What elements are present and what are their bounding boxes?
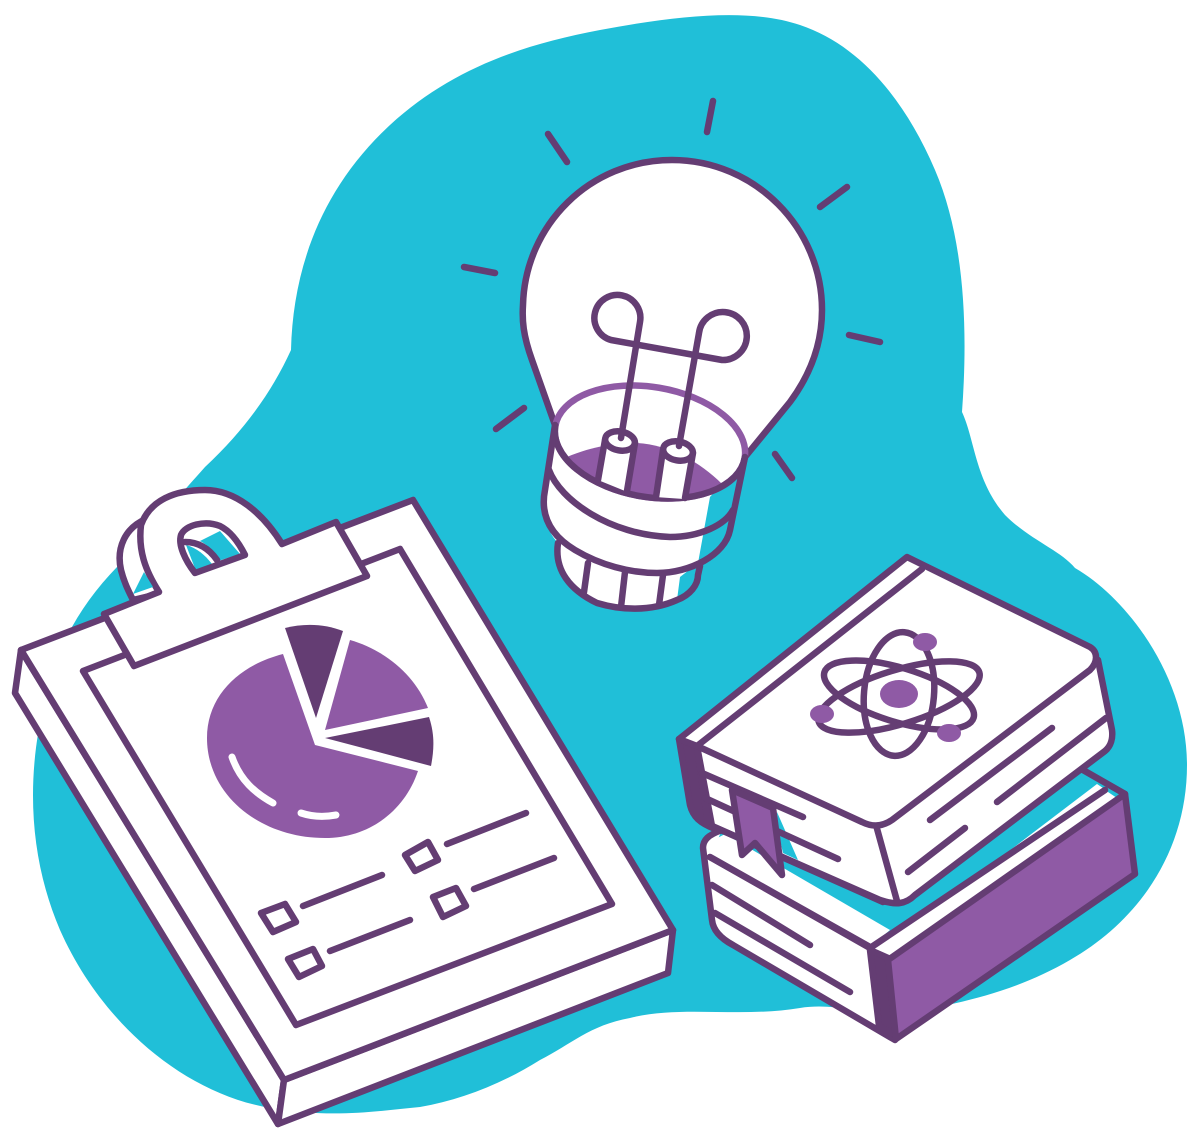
electron left bbox=[810, 705, 834, 723]
atom orbit one bbox=[817, 646, 981, 744]
page line 1 bbox=[702, 773, 803, 817]
paper sheet bbox=[83, 549, 612, 1025]
upper book pages bbox=[697, 660, 1112, 903]
cover inner line bbox=[697, 569, 922, 746]
right dark slice bbox=[325, 717, 433, 766]
upper book with atom bbox=[679, 557, 1112, 903]
legend line 1 bbox=[303, 875, 382, 906]
ray 7 bbox=[775, 454, 792, 478]
legend line 3 bbox=[330, 920, 410, 951]
clip hole inner arc bbox=[185, 542, 217, 560]
light rays bbox=[464, 101, 880, 478]
filament bbox=[594, 295, 747, 446]
light bulb bbox=[464, 101, 880, 609]
base band upper bbox=[549, 470, 733, 537]
clip hole outline bbox=[180, 523, 245, 573]
clip hole bbox=[180, 523, 245, 573]
lower book strip upper line bbox=[870, 790, 1105, 948]
clipboard bbox=[15, 490, 673, 1124]
right page line 1 bbox=[930, 728, 1052, 820]
atom nucleus bbox=[880, 680, 918, 708]
socket inner purple bbox=[568, 443, 721, 494]
lower book spine bbox=[870, 950, 897, 1036]
page line 3 bbox=[712, 826, 883, 902]
lower book page line 2 bbox=[712, 885, 810, 945]
teal seen through clip hole right bbox=[200, 531, 240, 561]
lower book page line top bbox=[710, 857, 870, 947]
thread line 1 bbox=[584, 563, 588, 592]
bookmark bbox=[732, 790, 782, 875]
socket lower rim bbox=[555, 426, 745, 499]
second pin edges bbox=[656, 450, 693, 498]
ray 6 bbox=[496, 408, 524, 429]
page fold edge bbox=[876, 825, 897, 901]
clipboard bottom edge bbox=[278, 930, 673, 1124]
pie highlight long bbox=[232, 757, 273, 803]
second contact pin bbox=[655, 439, 694, 499]
thread line 2 bbox=[621, 572, 625, 607]
atom icon bbox=[810, 629, 987, 759]
right page line 2 bbox=[908, 828, 965, 872]
clipboard side edge bbox=[15, 650, 284, 1124]
teal gap behind clip bbox=[133, 572, 153, 594]
ray 4 bbox=[464, 267, 495, 273]
ray 1 bbox=[548, 134, 567, 162]
glass outline bbox=[523, 160, 822, 457]
legend line 4 bbox=[474, 858, 554, 889]
large pie slice bbox=[207, 654, 418, 838]
lower book bbox=[703, 770, 1135, 1040]
lower book purple cover bbox=[888, 794, 1135, 1039]
lower book page line 3 bbox=[715, 913, 850, 992]
lower book back edge bbox=[1083, 770, 1125, 794]
lower book top cover bbox=[708, 834, 890, 947]
clip back loop bbox=[120, 519, 175, 600]
second pin body bbox=[655, 450, 692, 499]
second pin top bbox=[662, 439, 694, 463]
legend items bbox=[261, 813, 554, 977]
screw thread bbox=[557, 543, 700, 609]
electron top bbox=[913, 633, 937, 651]
thread line 3 bbox=[659, 575, 663, 605]
atom orbit two bbox=[811, 647, 987, 747]
pie chart bbox=[207, 625, 433, 838]
legend marker 1 bbox=[261, 904, 296, 932]
legend marker 3 bbox=[288, 949, 322, 977]
electron right bbox=[937, 724, 961, 742]
legend marker 4 bbox=[433, 888, 466, 917]
first contact pin bbox=[598, 429, 636, 491]
upper book top cover and strip bbox=[679, 557, 1096, 826]
pie highlight short bbox=[301, 813, 336, 816]
teal wedge by bookmark bbox=[777, 812, 798, 860]
upper book spine bbox=[679, 739, 715, 829]
upper right slice bbox=[325, 640, 428, 730]
base white fill bbox=[543, 425, 745, 609]
ray 2 bbox=[707, 101, 713, 132]
clipboard board bbox=[21, 500, 673, 1080]
base outer profile bbox=[544, 425, 745, 573]
clip body bbox=[104, 490, 367, 666]
clip hole fill bbox=[180, 523, 245, 573]
glass fill bbox=[523, 160, 822, 470]
teal seen through clip hole left bbox=[186, 545, 212, 571]
lower book white sliver bbox=[945, 784, 1106, 900]
socket rim bbox=[546, 372, 754, 512]
ray 5 bbox=[849, 335, 880, 342]
first pin top bbox=[604, 429, 636, 453]
legend marker 2 bbox=[405, 842, 438, 871]
top dark slice bbox=[285, 625, 343, 718]
legend line 2 bbox=[447, 813, 526, 844]
first pin edges bbox=[598, 440, 635, 491]
first pin body bbox=[598, 441, 635, 491]
lower book top strip bbox=[870, 790, 1120, 958]
right page line 3 bbox=[997, 718, 1106, 802]
page line 2 bbox=[705, 798, 838, 859]
lower book pages bbox=[703, 830, 895, 1040]
ray 3 bbox=[820, 187, 847, 207]
atom orbit vertical bbox=[859, 629, 939, 759]
